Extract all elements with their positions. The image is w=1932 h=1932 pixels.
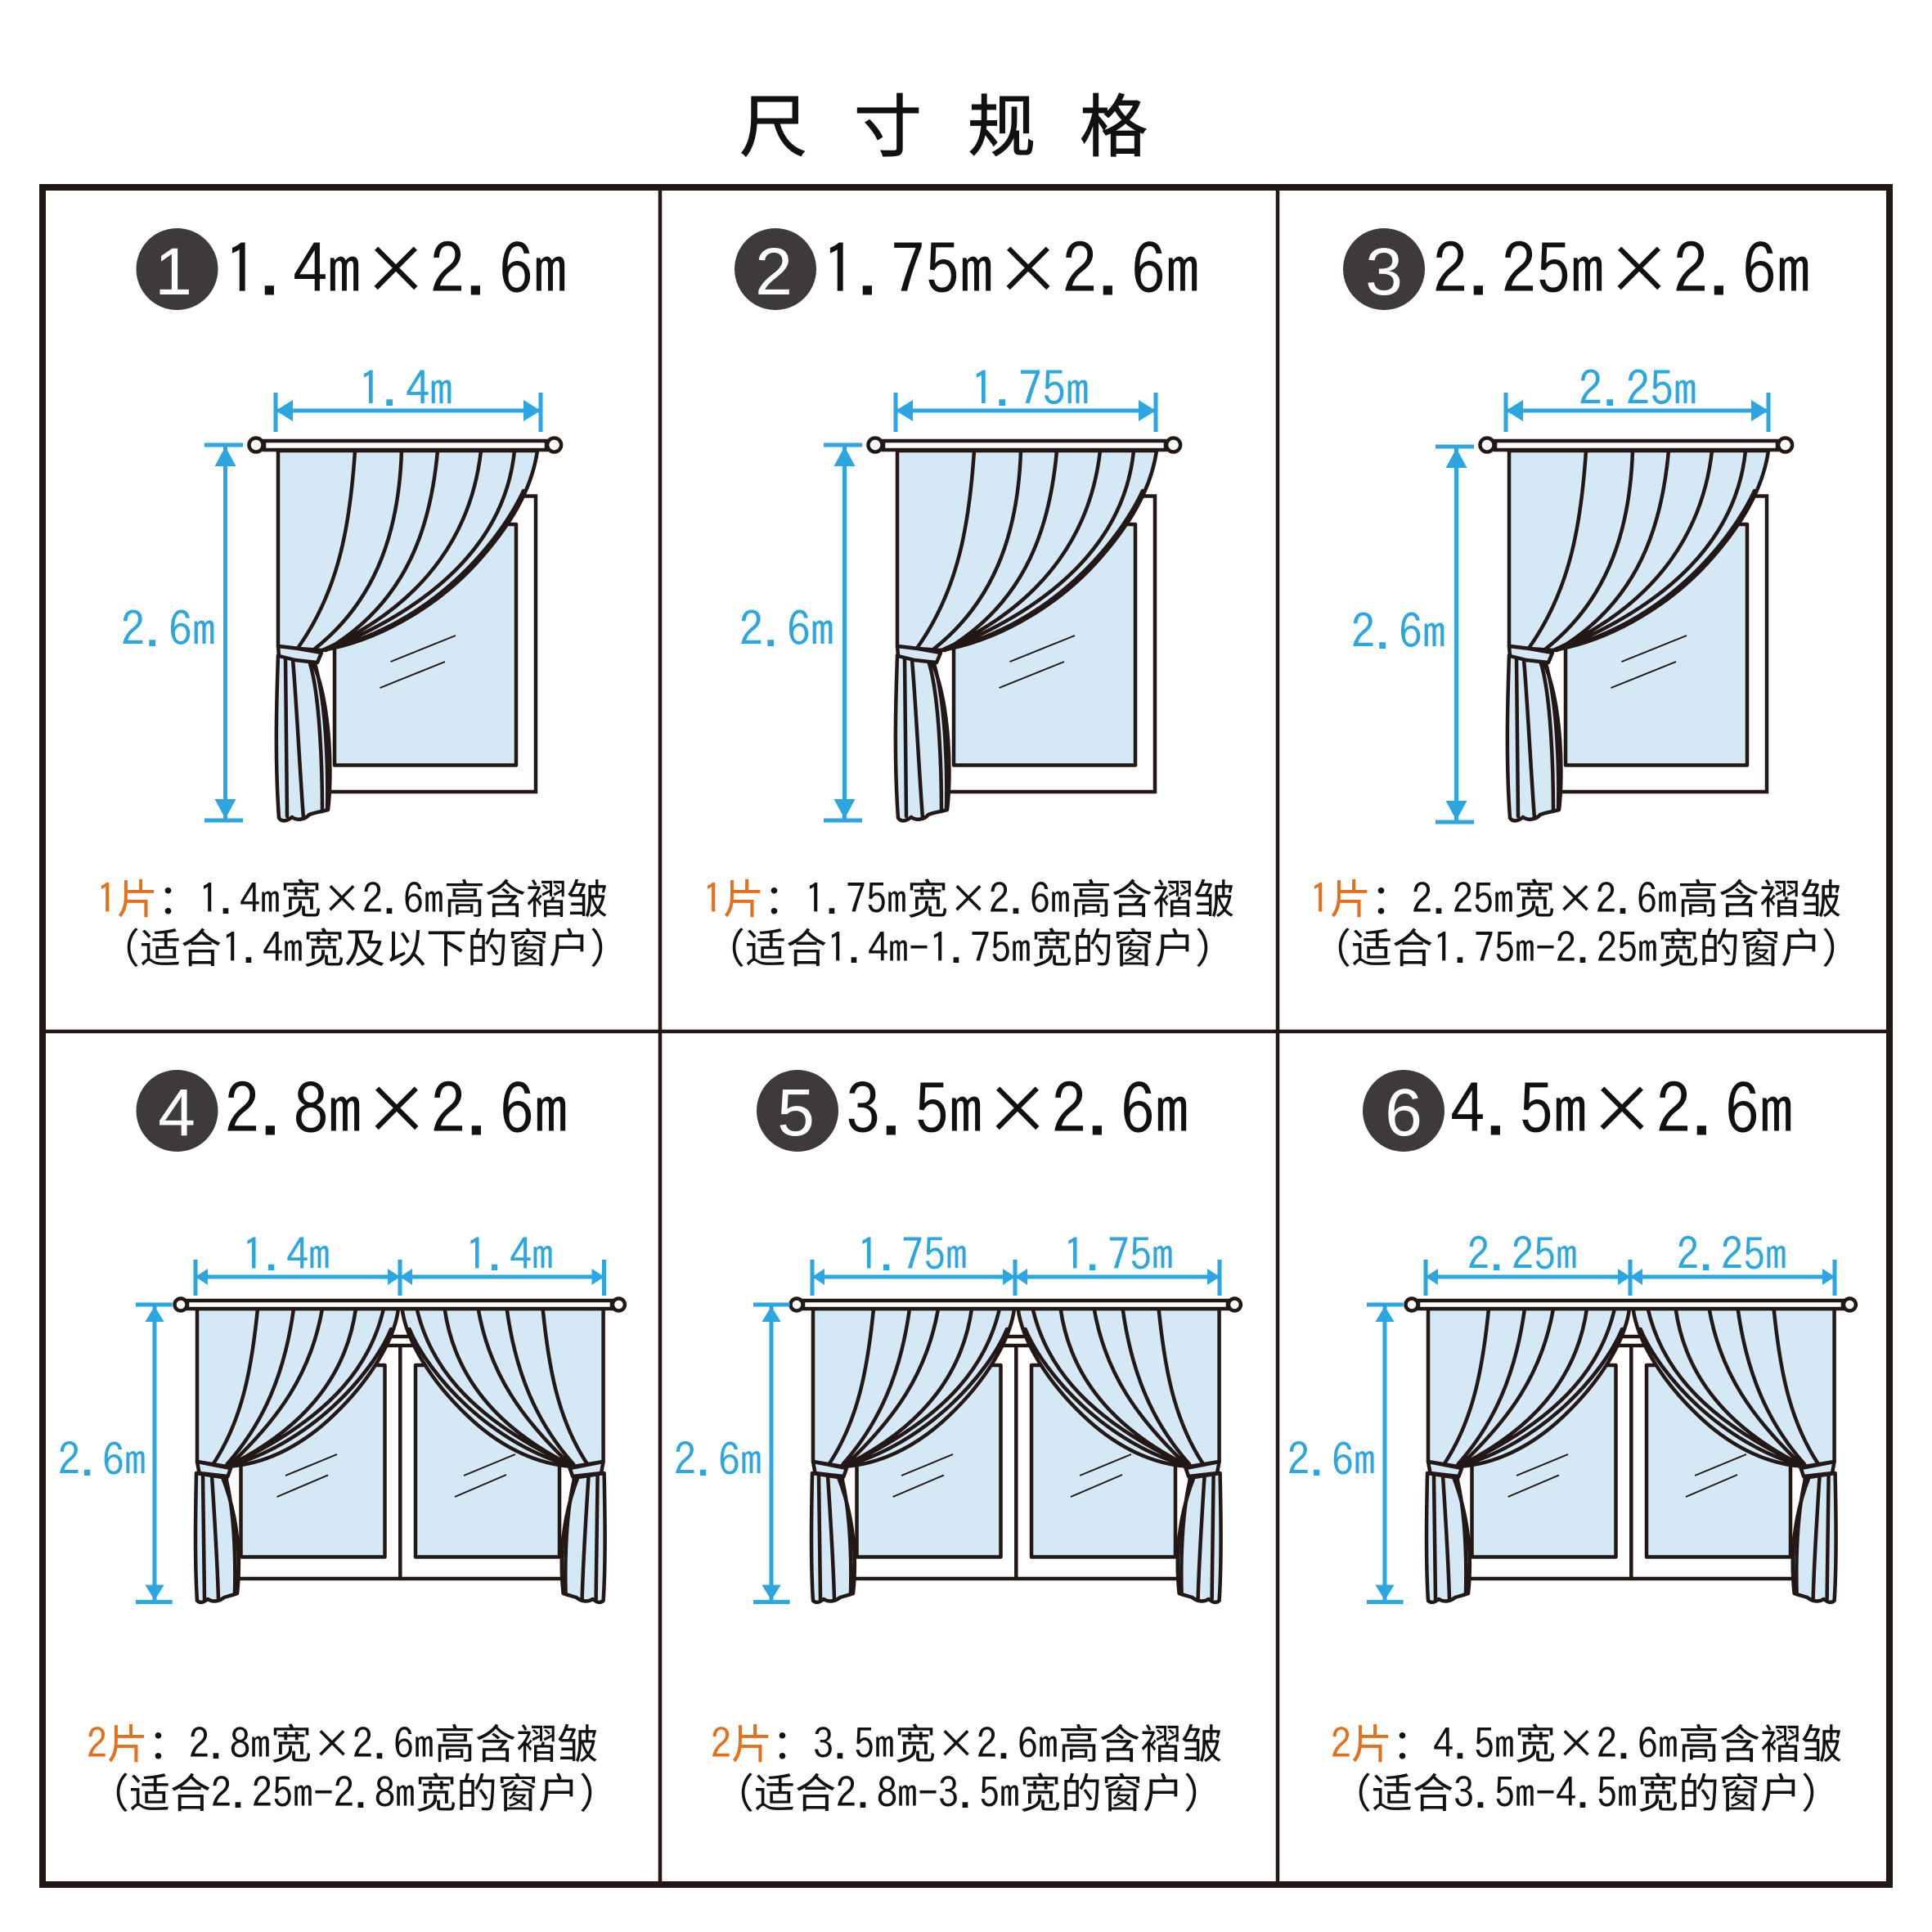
width dimension 4: 1.4m <box>465 1232 554 1276</box>
description 5 <box>711 1712 1224 1820</box>
width dimension 1: 1.4m <box>358 364 453 411</box>
width dimension 3: 2.25m <box>1579 364 1697 411</box>
number badge 2 <box>735 228 816 310</box>
width dimension 6: 2.25m <box>1677 1232 1787 1276</box>
height dimension 3 <box>1351 447 1474 822</box>
description 6: 2片：4.5m宽×2.6m高含褶皱 <box>1331 1712 1842 1771</box>
panel: 2.8m x 2.6m <box>58 1070 625 1820</box>
width dimension 5: 1.75m <box>1063 1232 1174 1276</box>
curtain illustration 2 <box>869 438 1180 820</box>
description 4 <box>87 1712 620 1820</box>
width dimension 2 <box>896 364 1156 432</box>
description 3 <box>1310 867 1862 975</box>
heading 3: 2.25m×2.6m <box>1433 235 1811 303</box>
number badge 4 <box>136 1070 218 1152</box>
curtain illustration 3 <box>1480 438 1792 820</box>
height dimension 1 <box>121 445 243 820</box>
description 4: （适合2.25m-2.8m宽的窗户） <box>88 1761 620 1820</box>
panel: 4.5m x 2.6m <box>1287 1070 1856 1820</box>
height dimension 6 <box>1287 1305 1404 1602</box>
panel: 1.4m x 2.6m <box>97 228 631 975</box>
width dimension 3 <box>1506 364 1768 432</box>
width dimension 5: 1.75m <box>857 1232 968 1276</box>
number badge 3: 3 <box>1365 235 1403 309</box>
description 2: 1片：1.75m宽×2.6m高含褶皱 <box>703 867 1234 926</box>
width dimension 1 <box>276 364 541 432</box>
width dimension 2: 1.75m <box>971 364 1090 411</box>
height dimension 2: 2.6m <box>739 604 834 652</box>
curtain illustration 1 <box>249 438 561 820</box>
heading 6: 4.5m×2.6m <box>1450 1075 1794 1143</box>
panel: 3.5m x 2.6m <box>674 1070 1241 1820</box>
width dimension 6: 2.25m <box>1467 1232 1578 1276</box>
number badge 1 <box>136 228 218 310</box>
width dimension 5 <box>812 1232 1220 1296</box>
width dimension 6 <box>1426 1232 1835 1296</box>
description 2 <box>703 867 1236 975</box>
description 3: （适合1.75m-2.25m宽的窗户） <box>1310 916 1862 975</box>
description 2: （适合1.4m-1.75m宽的窗户） <box>704 916 1236 975</box>
number badge 6 <box>1363 1070 1445 1152</box>
height dimension 5: 2.6m <box>674 1437 762 1481</box>
number badge 3 <box>1343 228 1425 310</box>
heading 2: 1.75m×2.6m <box>822 235 1200 303</box>
height dimension 4 <box>58 1305 173 1602</box>
description 6: （适合3.5m-4.5m宽的窗户） <box>1331 1761 1842 1820</box>
number badge 2: 2 <box>755 235 793 309</box>
width dimension 4: 1.4m <box>242 1232 330 1276</box>
curtain illustration 6 <box>1405 1299 1856 1602</box>
number badge 5 <box>757 1070 838 1152</box>
heading 5: 3.5m×2.6m <box>846 1075 1189 1143</box>
description 5: 2片：3.5m宽×2.6m高含褶皱 <box>711 1712 1222 1771</box>
heading 1: 1.4m×2.6m <box>224 235 568 303</box>
width dimension 4 <box>195 1232 604 1296</box>
number badge 5: 5 <box>777 1076 815 1150</box>
height dimension 1: 2.6m <box>121 604 216 652</box>
description 1 <box>97 867 631 975</box>
number badge 1: 1 <box>155 235 192 309</box>
curtain illustration 5 <box>790 1299 1241 1602</box>
number badge 4: 4 <box>158 1076 195 1150</box>
height dimension 4: 2.6m <box>58 1437 146 1481</box>
description 1: （适合1.4m宽及以下的窗户） <box>99 916 631 975</box>
number badge 6: 6 <box>1385 1076 1422 1150</box>
description 5: （适合2.8m-3.5m宽的窗户） <box>713 1761 1224 1820</box>
panel: 1.75m x 2.6m <box>703 228 1236 975</box>
height dimension 2 <box>739 445 862 820</box>
description 6 <box>1331 1712 1842 1820</box>
height dimension 3: 2.6m <box>1351 607 1446 654</box>
description 4: 2片：2.8m宽×2.6m高含褶皱 <box>87 1712 598 1771</box>
heading 4: 2.8m×2.6m <box>225 1075 568 1143</box>
description 1: 1片：1.4m宽×2.6m高含褶皱 <box>97 867 608 926</box>
panel: 2.25m x 2.6m <box>1310 228 1862 975</box>
height dimension 6: 2.6m <box>1287 1437 1376 1481</box>
title: 尺寸规格 <box>739 72 1148 170</box>
curtain illustration 4 <box>175 1299 625 1602</box>
description 3: 1片：2.25m宽×2.6m高含褶皱 <box>1310 867 1841 926</box>
height dimension 5 <box>674 1305 790 1602</box>
